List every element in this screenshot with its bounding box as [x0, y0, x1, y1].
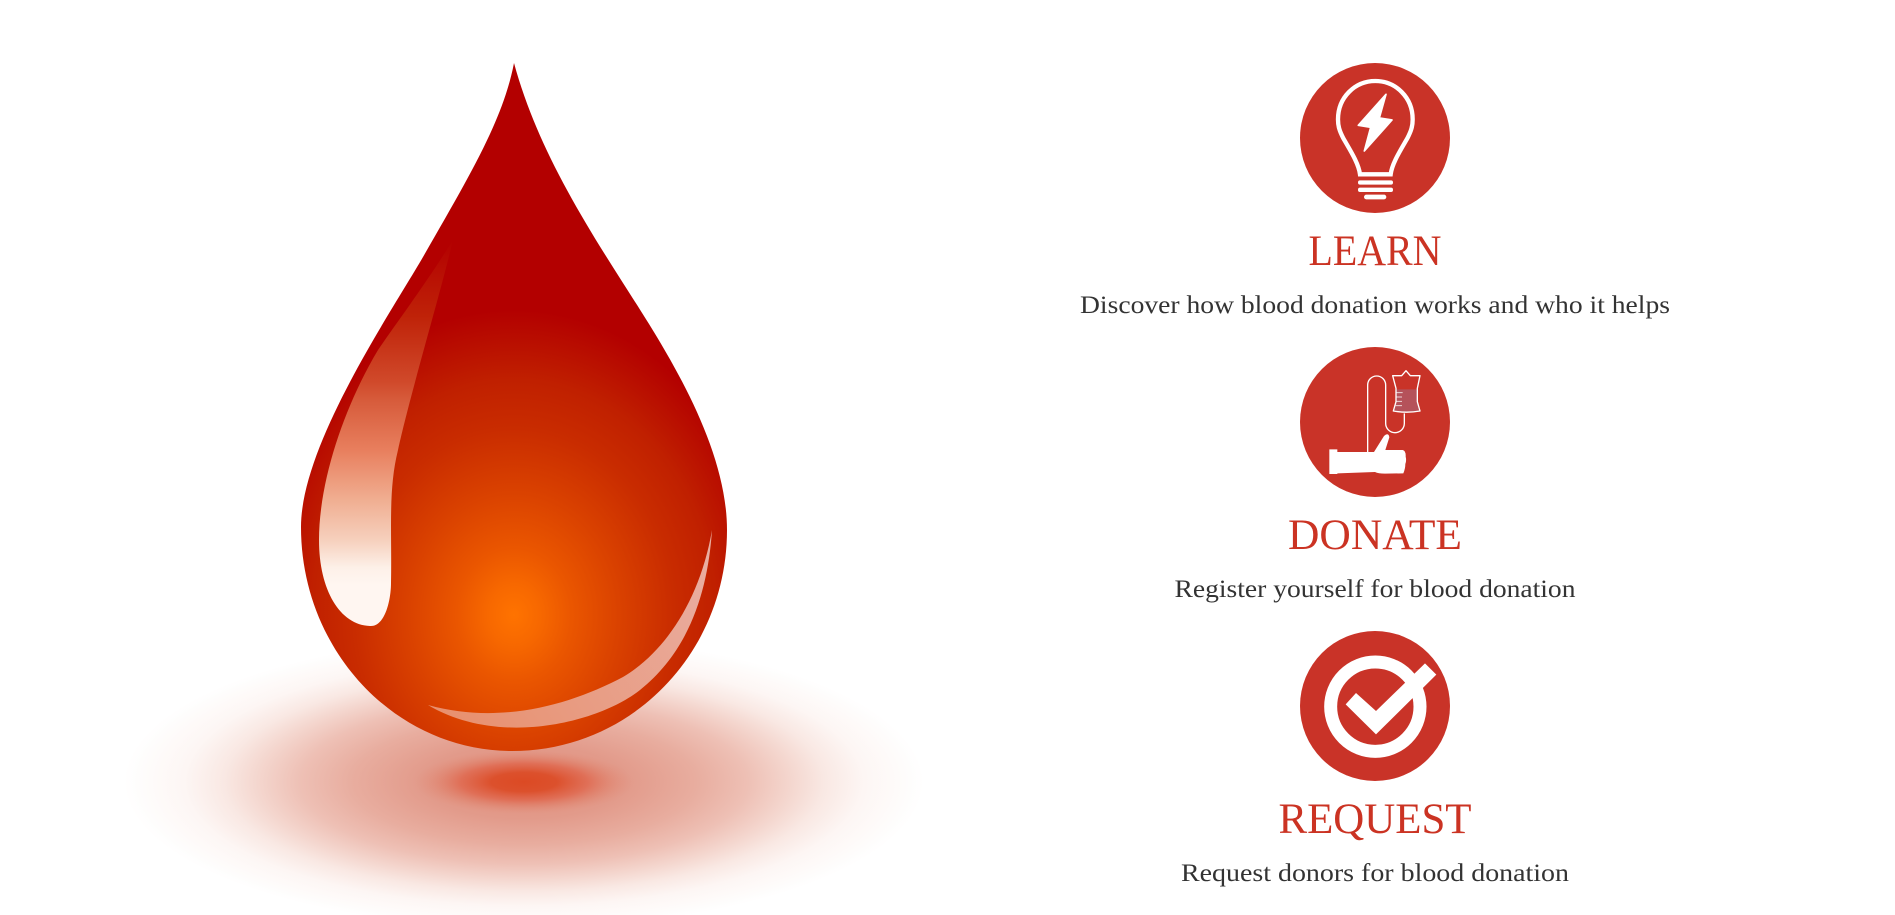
heading: donate: DONATE: [1288, 512, 1462, 559]
heading: learn: LEARN: [1308, 228, 1442, 275]
item: donate: [1174, 347, 1576, 603]
bottom highlight: [428, 530, 712, 728]
drop body: [301, 63, 727, 751]
description: request: Request donors for blood donation: [1181, 860, 1570, 887]
blood drop illustration: [301, 63, 727, 751]
item: learn: [1080, 63, 1670, 319]
icon: arm with blood bag: [1300, 347, 1450, 497]
icon: light bulb: [1300, 63, 1450, 213]
description: donate: Register yourself for blood donation: [1174, 576, 1576, 603]
left highlight: [319, 240, 453, 626]
heading: request: REQUEST: [1278, 796, 1472, 843]
item: request: [1181, 631, 1570, 887]
icon: check mark in ring: [1300, 631, 1450, 781]
description: learn: Discover how blood donation works and who it helps: [1080, 292, 1670, 319]
drop shadow on the ground: [124, 636, 924, 915]
